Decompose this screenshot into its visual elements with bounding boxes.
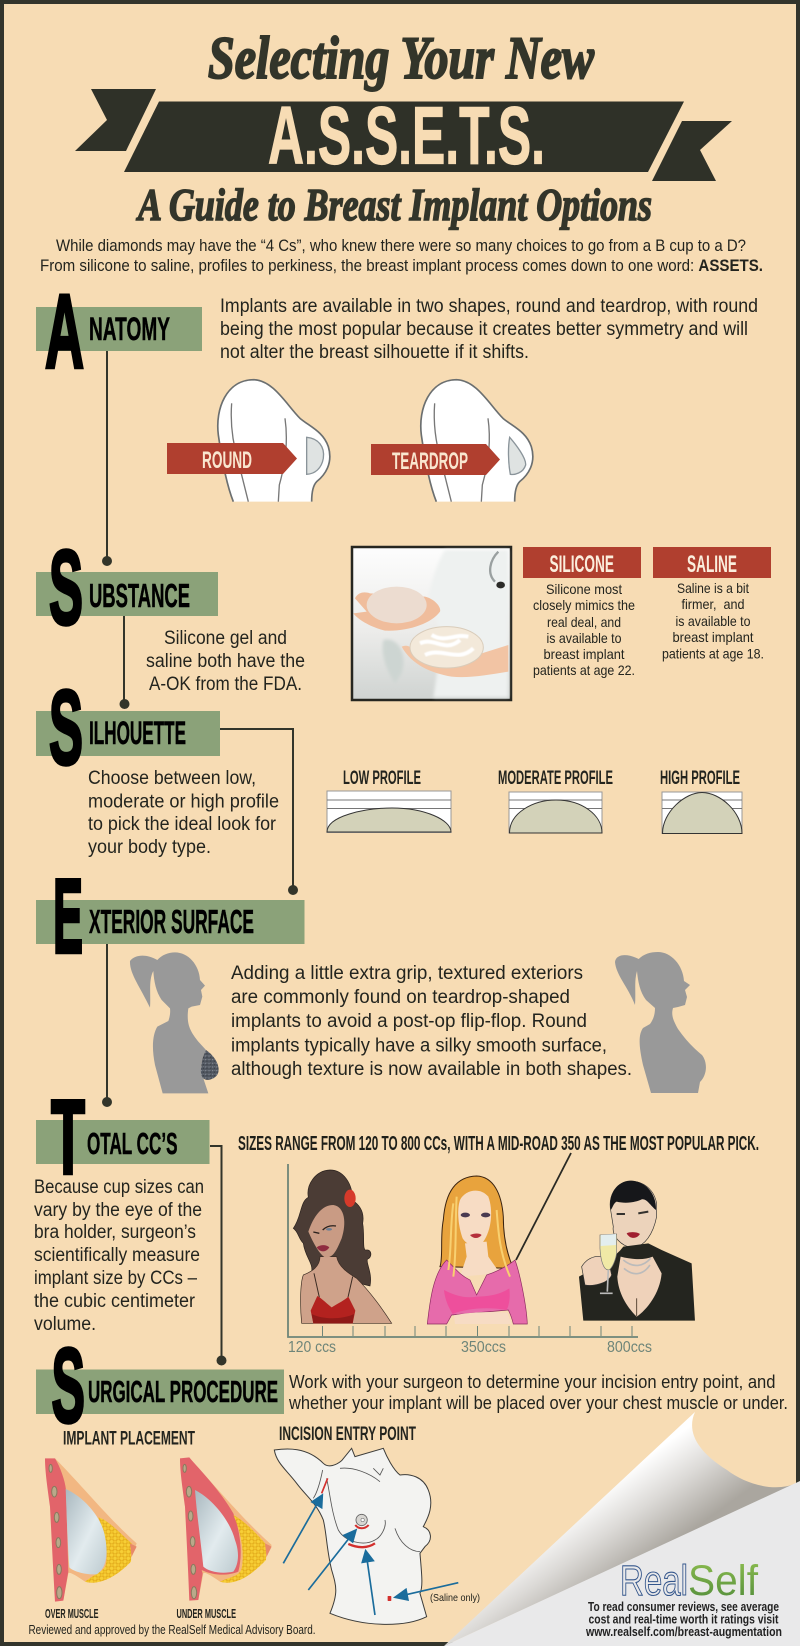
section heading: Anatomy: NATOMY [89, 311, 170, 347]
card: saline: is available to [676, 613, 751, 629]
connector: exterior surface to total cc [102, 943, 112, 1107]
total cc text: Because cup sizes can [34, 1177, 204, 1198]
illustration: woman 800cc [579, 1181, 695, 1321]
connector: silhouette to exterior surface [220, 729, 298, 895]
photo: hands holding implants [352, 547, 511, 700]
section heading: Total CC's: OTAL CC’S [87, 1126, 178, 1161]
anatomy text: Implants are available in two shapes, round and teardrop, with round [220, 296, 758, 317]
intro text: From silicone to saline, profiles to perkiness, the breast implant process comes down to one word: ASSETS. [40, 257, 763, 275]
card: silicone: breast implant [544, 646, 625, 662]
diagram: low profile: LOW PROFILE [343, 768, 421, 789]
section heading: Surgical Procedure: S [52, 1327, 85, 1445]
total cc text: scientifically measure [34, 1245, 200, 1266]
label: over muscle: OVER MUSCLE [45, 1607, 98, 1621]
total cc text: bra holder, surgeon’s [34, 1222, 196, 1243]
diagram: round implant: ROUND [202, 447, 252, 474]
chart axis: size scale [288, 1164, 652, 1356]
label: saline only: (Saline only) [430, 1592, 480, 1604]
chart axis: size scale: 800ccs [607, 1339, 652, 1356]
surgical text [288, 1371, 788, 1413]
substance text: saline both have the [146, 651, 305, 672]
exterior surface text: are commonly found on teardrop-shaped [231, 987, 570, 1008]
section heading: Silhouette: ILHOUETTE [89, 715, 186, 751]
silhouette text [88, 768, 279, 858]
card: silicone: is available to [546, 630, 622, 646]
diagram: round implant [167, 380, 330, 502]
anatomy text: being the most popular because it creates better symmetry and will [220, 319, 748, 340]
connector: anatomy to substance [102, 351, 112, 566]
silhouette text: Choose between low, [88, 768, 256, 789]
heading: incision entry point: INCISION ENTRY POINT [279, 1424, 416, 1445]
exterior surface text: implants typically have a silky smooth surface, [231, 1036, 607, 1056]
diagram: teardrop implant: TEARDROP [392, 448, 468, 475]
icon: smooth silhouette [615, 952, 706, 1093]
card: saline [653, 547, 771, 662]
logo: RealSelf: Real [620, 1557, 688, 1605]
heading: implant placement: IMPLANT PLACEMENT [63, 1428, 195, 1450]
total cc text [34, 1177, 204, 1335]
diagram: high profile [660, 768, 742, 834]
exterior surface text: although texture is now available in both shapes. [231, 1059, 632, 1080]
logo: RealSelf: Self [688, 1557, 759, 1605]
section heading: Anatomy: A [45, 274, 84, 390]
section heading: Exterior Surface: XTERIOR SURFACE [89, 903, 254, 940]
diagram: torso with incision points [274, 1448, 458, 1624]
silhouette text: moderate or high profile [88, 792, 279, 812]
section heading: Total CC's: T [51, 1078, 85, 1196]
title: Selecting Your New: Selecting Your New [208, 25, 595, 91]
section heading: Surgical Procedure: URGICAL PROCEDURE [88, 1374, 278, 1409]
anatomy text [220, 296, 758, 363]
section heading: Substance [36, 529, 218, 647]
card: saline: SALINE [687, 551, 737, 578]
page curl [444, 1412, 800, 1646]
total cc text: volume. [34, 1314, 96, 1335]
card: saline: breast implant [672, 629, 754, 645]
connector: total cc to surgical procedure [210, 1146, 226, 1366]
card: silicone [523, 547, 641, 678]
substance text: Silicone gel and [164, 628, 287, 649]
chart axis: size scale: 120 ccs [288, 1339, 336, 1356]
intro text: While diamonds may have the “4 Cs”, who knew there were so many choices to go from a B cup to a D? [56, 237, 746, 255]
exterior surface text: Adding a little extra grip, textured exteriors [231, 963, 583, 984]
icon: textured silhouette [130, 952, 219, 1093]
label: under muscle: UNDER MUSCLE [176, 1607, 236, 1621]
card: silicone: closely mimics the [533, 597, 635, 613]
connector: substance to silhouette [120, 616, 130, 709]
section heading: Substance: UBSTANCE [89, 577, 190, 614]
card: saline: firmer, and [682, 596, 744, 612]
substance text: A-OK from the FDA. [149, 674, 302, 695]
card: silicone: real deal, and [547, 614, 621, 630]
pointer line to 350 [516, 1153, 571, 1260]
card: saline: patients at age 18. [662, 646, 764, 662]
illustration: woman 350cc [427, 1176, 527, 1324]
diagram: moderate profile: MODERATE PROFILE [498, 768, 613, 789]
diagram: teardrop implant [371, 380, 533, 502]
banner ribbon: A.S.S.E.T.S.: A.S.S.E.T.S. [268, 90, 545, 182]
banner ribbon: A.S.S.E.T.S. [75, 89, 732, 182]
card: saline: Saline is a bit [677, 580, 749, 596]
total cc text: vary by the eye of the [34, 1200, 202, 1221]
section heading: Silhouette [36, 669, 220, 787]
logo: RealSelf [620, 1557, 759, 1605]
subtitle: A Guide to Breast Implant Options [136, 179, 652, 230]
footnote: reviewed and approved: Reviewed and approved by the RealSelf Medical Advisory Board. [28, 1623, 316, 1637]
section heading: Exterior Surface: E [53, 858, 83, 976]
diagram: high profile: HIGH PROFILE [660, 768, 740, 789]
section heading: Substance: S [49, 529, 83, 647]
card: silicone: SILICONE [550, 551, 614, 578]
intro text [40, 237, 763, 275]
exterior surface text [231, 963, 632, 1080]
total cc text: implant size by CCs – [34, 1268, 197, 1289]
illustration: woman 120cc [293, 1170, 392, 1323]
section heading: Exterior Surface [36, 858, 304, 976]
section heading: Surgical Procedure [36, 1327, 284, 1445]
realself call to action [585, 1600, 782, 1639]
silhouette text: your body type. [88, 837, 211, 858]
diagram: moderate profile [498, 768, 613, 833]
diagram: under muscle placement [180, 1457, 272, 1601]
section heading: Total CC's [36, 1078, 210, 1196]
anatomy text: not alter the breast silhouette if it shifts. [220, 342, 529, 363]
substance text [146, 628, 305, 695]
card: silicone: patients at age 22. [533, 662, 635, 678]
section heading: Anatomy [36, 274, 202, 390]
section heading: Silhouette: S [49, 669, 83, 787]
chart axis: size scale: 350ccs [461, 1339, 506, 1356]
card: silicone: Silicone most [546, 581, 622, 597]
exterior surface text: implants to avoid a post-op flip-flop. Round [231, 1011, 587, 1032]
diagram: over muscle placement [45, 1458, 137, 1602]
diagram: low profile [327, 768, 451, 832]
silhouette text: to pick the ideal look for [88, 814, 277, 835]
total cc text: the cubic centimeter [34, 1291, 196, 1312]
